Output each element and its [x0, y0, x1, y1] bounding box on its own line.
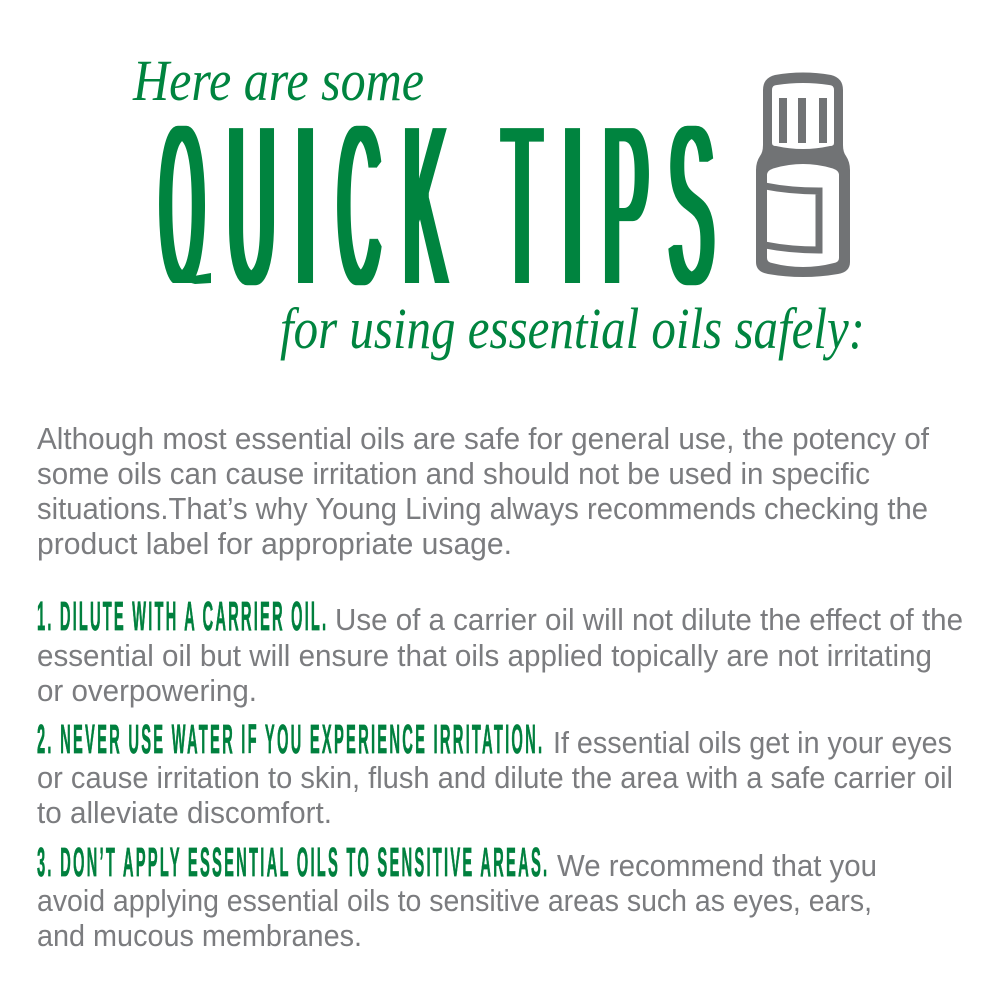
heading: quick tips: [159, 126, 715, 286]
tip 2: never use water if you experience irritation: to alleviate discomfort.: [37, 795, 332, 830]
heading: quick tips: U: [228, 75, 275, 334]
tip 1: dilute with a carrier oil: Use of a carrier oil will not dilute the effect of the: [335, 602, 963, 637]
intro paragraph: situations.That’s why Young Living always recommends checking the: [37, 491, 928, 526]
tip 2: never use water if you experience irritation: [37, 716, 953, 830]
heading: quick tips: K: [404, 75, 447, 334]
heading: quick tips: I: [562, 78, 583, 335]
heading: quick tips: C: [338, 75, 380, 334]
intro paragraph: Although most essential oils are safe for general use, the potency of: [37, 421, 929, 456]
heading: here are some: Here are some: [132, 48, 424, 113]
tip 1: dilute with a carrier oil: essential oil but will ensure that oils applied topically are not irritating: [37, 638, 932, 673]
intro paragraph: product label for appropriate usage.: [37, 526, 512, 561]
tip 1: dilute with a carrier oil: [37, 593, 963, 708]
tip 3: don't apply essential oils to sensitive areas: We recommend that you: [557, 848, 877, 883]
tip 3: don't apply essential oils to sensitive areas: 3. DON’T APPLY ESSENTIAL OILS TO SENSITIVE AREAS.: [37, 839, 547, 885]
title block: [132, 48, 865, 361]
intro paragraph: [37, 421, 929, 561]
tip 3: don't apply essential oils to sensitive areas: avoid applying essential oils to sensitive areas such as eyes, ears,: [37, 883, 872, 918]
tip 1: dilute with a carrier oil: or overpowering.: [37, 673, 257, 708]
heading: quick tips: S: [669, 77, 714, 335]
heading: quick tips: T: [503, 76, 541, 334]
icon: essential oil bottle: [756, 72, 850, 277]
tip 2: never use water if you experience irritation: or cause irritation to skin, flush and dilute the area with a safe carrier oil: [37, 760, 953, 795]
heading: quick tips: I: [295, 78, 316, 335]
heading: quick tips: Q: [160, 76, 204, 334]
heading: for using essential oils safely: for using essential oils safely:: [280, 296, 865, 361]
heading: quick tips: P: [603, 77, 649, 335]
tip 3: don't apply essential oils to sensitive areas: and mucous membranes.: [37, 918, 362, 953]
tip 1: dilute with a carrier oil: 1. DILUTE WITH A CARRIER OIL.: [37, 593, 326, 639]
tip 3: don't apply essential oils to sensitive areas: [37, 839, 877, 953]
intro paragraph: some oils can cause irritation and should not be used in specific: [37, 456, 870, 491]
tip 2: never use water if you experience irritation: 2. NEVER USE WATER IF YOU EXPERIENCE IRRITATION.: [37, 716, 542, 762]
tip 2: never use water if you experience irritation: If essential oils get in your eyes: [553, 725, 952, 760]
